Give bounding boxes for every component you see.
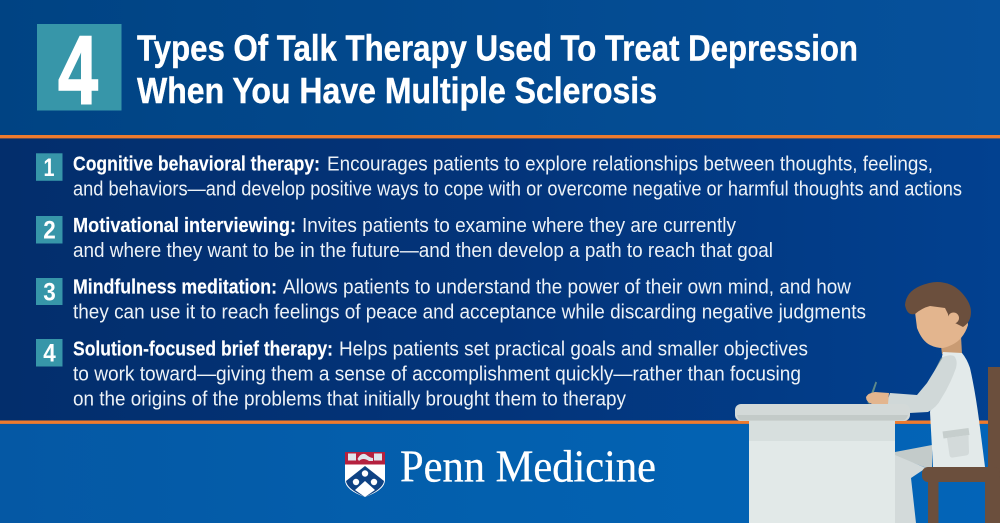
neck xyxy=(941,336,962,354)
text: cognitive behavioral therapy xyxy=(73,152,962,200)
head xyxy=(905,282,971,348)
title: Types Of Talk Therapy Used To Treat Depression xyxy=(137,28,858,68)
title xyxy=(137,28,858,111)
text: solution-focused brief therapy: Solution-focused brief therapy: xyxy=(73,338,333,360)
logo: Penn Medicine xyxy=(345,442,656,497)
text: mindfulness meditation xyxy=(73,276,866,324)
badge 3 xyxy=(36,278,62,306)
wordmark: Penn Medicine xyxy=(400,442,656,492)
list item 1 xyxy=(36,152,962,200)
pen xyxy=(868,382,877,404)
text: mindfulness meditation: Allows patients to understand the power of their own mind, and how xyxy=(283,276,851,298)
title: When You Have Multiple Sclerosis xyxy=(137,70,657,111)
badge 4: 4 xyxy=(43,340,56,368)
illustration: doctor at desk xyxy=(735,282,1000,523)
list item 4 xyxy=(36,338,808,410)
badge 1 xyxy=(36,153,62,182)
panel: list background xyxy=(0,138,1000,421)
list item 2 xyxy=(36,214,773,262)
ear xyxy=(948,312,959,324)
text: mindfulness meditation: Mindfulness meditation: xyxy=(73,276,277,298)
text: motivational interviewing: Motivational interviewing: xyxy=(73,214,296,237)
panel: header background xyxy=(0,0,1000,136)
text: solution-focused brief therapy: on the origins of the problems that initially brought them to therapy xyxy=(73,388,627,410)
panel: footer background xyxy=(0,424,1000,523)
sleeve xyxy=(887,355,957,414)
face xyxy=(915,300,968,348)
text: cognitive behavioral therapy: Cognitive behavioral therapy: xyxy=(73,152,320,176)
text: solution-focused brief therapy: Helps patients set practical goals and smaller objectives xyxy=(339,338,808,360)
icon: Penn shield xyxy=(345,452,385,497)
text: motivational interviewing: and where they want to be in the future—and then develop a path to reach that goal xyxy=(73,239,773,262)
chair xyxy=(922,367,1000,523)
text: cognitive behavioral therapy: Encourages patients to explore relationships between thoughts, feelings, xyxy=(327,152,933,176)
legs xyxy=(895,445,932,523)
badge 2: 2 xyxy=(43,216,56,244)
badge 1: 1 xyxy=(44,154,55,182)
text: solution-focused brief therapy xyxy=(73,338,808,410)
desk xyxy=(735,404,910,523)
badge 3: 3 xyxy=(43,278,56,306)
hair xyxy=(905,282,971,327)
text: motivational interviewing: Invites patients to examine where they are currently xyxy=(302,214,737,237)
text: mindfulness meditation: they can use it to reach feelings of peace and acceptance while discarding negative judgments xyxy=(73,300,866,324)
number badge: 4: 4 xyxy=(58,16,98,124)
text: solution-focused brief therapy: to work toward—giving them a sense of accomplishment quickly—rather than focusing xyxy=(73,362,801,386)
text: motivational interviewing xyxy=(73,214,773,262)
pocket xyxy=(942,428,970,438)
badge 4 xyxy=(36,339,62,368)
coat xyxy=(887,352,985,467)
badge 2 xyxy=(36,216,62,244)
list item 3 xyxy=(36,276,866,324)
number badge: 4 xyxy=(37,16,122,124)
hand xyxy=(866,392,889,404)
